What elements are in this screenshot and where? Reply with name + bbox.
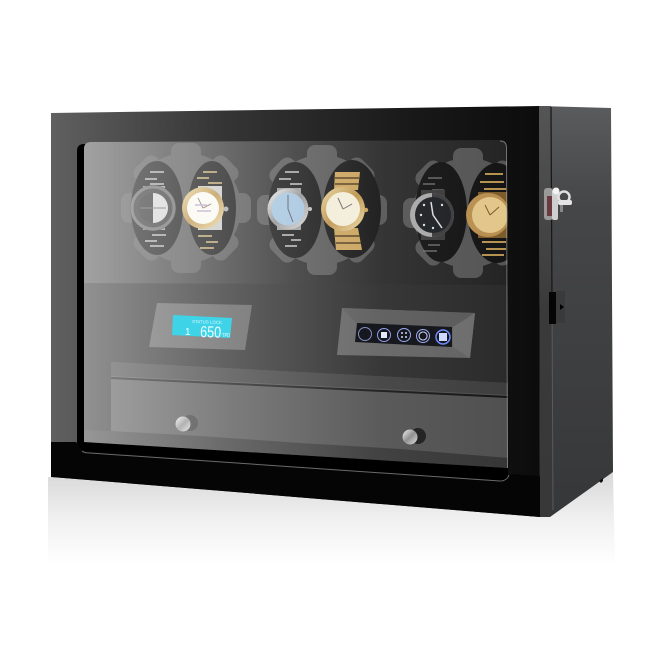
panel: winder rotors	[121, 143, 533, 278]
LCD screen: TPD	[222, 333, 230, 339]
glossy black base band	[51, 442, 540, 517]
lower lip highlight	[82, 451, 509, 481]
watch drawer	[84, 362, 508, 470]
LCD screen: 650	[200, 324, 222, 342]
watch 6	[466, 174, 510, 255]
interior background	[80, 135, 515, 285]
LCD screen: STATUS LOCK	[192, 319, 222, 325]
floor shadow	[48, 472, 615, 565]
watch 4	[321, 172, 368, 250]
rotor gear 2	[257, 145, 387, 275]
touch buttons	[355, 323, 452, 347]
watch 5	[410, 178, 454, 251]
side switch	[549, 291, 565, 324]
watch 2	[182, 172, 228, 248]
cabinet front frame	[51, 106, 540, 517]
drawer knob right	[402, 428, 426, 444]
cabinet side panel	[539, 106, 613, 517]
watch 3	[268, 172, 312, 246]
LCD screen: 1	[185, 327, 191, 338]
LCD screen	[172, 315, 232, 338]
glass door window	[84, 140, 508, 468]
control band	[84, 283, 508, 470]
rotor gear 1	[121, 143, 251, 273]
touch control housing	[337, 308, 475, 358]
glass edge highlight	[500, 141, 508, 468]
black window recess	[77, 144, 508, 481]
glass reflection	[84, 140, 432, 462]
drawer knob left	[176, 415, 198, 432]
rotor gear 3	[403, 148, 508, 278]
chrome lock	[544, 188, 572, 220]
LCD housing	[149, 303, 252, 350]
watch winder product illustration	[48, 106, 614, 540]
watch 1	[130, 172, 176, 246]
